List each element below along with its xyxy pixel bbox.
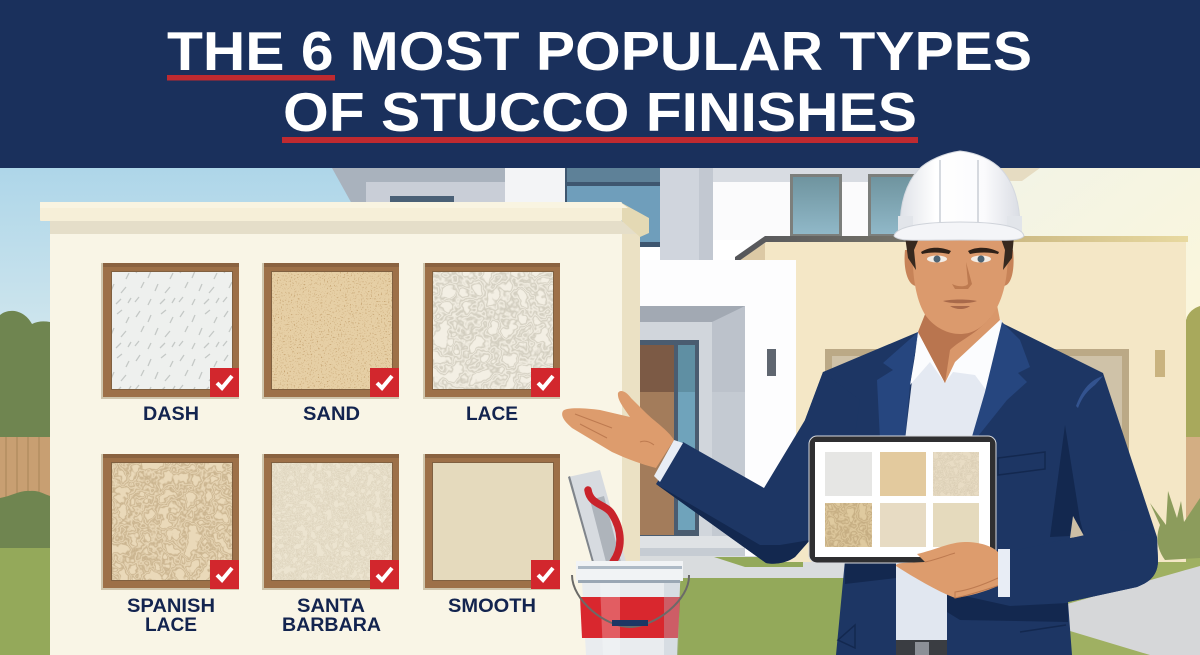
check badge <box>531 560 560 589</box>
title: THE 6 MOST POPULAR TYPES <box>167 20 1032 82</box>
swatch: lace <box>423 263 560 425</box>
wall body <box>50 222 640 655</box>
house <box>332 168 1200 562</box>
upper left roof volume <box>332 168 505 204</box>
right lapel <box>971 322 1030 440</box>
jacket lower pockets <box>838 625 1066 648</box>
shirt <box>896 320 1002 655</box>
ears <box>905 250 1014 286</box>
white entry block <box>640 260 796 556</box>
label: SANTA <box>297 596 365 617</box>
left arm <box>656 372 860 564</box>
background scenery <box>0 168 1200 655</box>
roof corner behind helmet <box>1000 168 1040 181</box>
hedge: upper left <box>0 311 50 438</box>
front door <box>640 340 699 536</box>
feature wall <box>40 202 649 655</box>
shoulder highlight <box>1076 376 1103 408</box>
label: SAND <box>303 404 360 425</box>
eyebrows <box>921 248 999 254</box>
face <box>913 235 1008 334</box>
mouth <box>943 300 977 309</box>
swatch: smooth <box>423 454 560 617</box>
grey recess <box>660 168 713 261</box>
tablet swatches <box>825 452 979 547</box>
title underline: first line <box>167 75 335 80</box>
holding hand <box>896 542 1000 598</box>
neck shadow <box>918 312 990 383</box>
pocket <box>998 452 1045 475</box>
hair <box>905 236 1014 270</box>
upper white wall <box>713 168 1000 240</box>
title: OF STUCCO FINISHES <box>283 81 917 143</box>
wall light: white block <box>767 349 776 376</box>
icon: bucket <box>572 561 689 655</box>
hedge: lower left <box>0 491 50 548</box>
check badge <box>210 560 239 589</box>
torso <box>796 323 1158 655</box>
check badge <box>370 560 399 589</box>
gap at elbow <box>1070 516 1084 538</box>
pointing hand <box>562 391 674 468</box>
label <box>127 596 215 636</box>
neck <box>918 300 1000 383</box>
white tower <box>505 168 567 208</box>
wall side shading <box>622 222 640 655</box>
label: DASH <box>143 404 199 425</box>
wall light: cream wall <box>1155 350 1165 377</box>
check badge <box>210 368 239 397</box>
left cuff <box>654 440 683 482</box>
title underline: second line <box>282 137 918 143</box>
swatch: spanish lace <box>101 454 239 636</box>
entry recess <box>640 306 745 556</box>
right forearm <box>1008 530 1158 606</box>
large window <box>565 168 671 247</box>
eyes <box>927 256 991 262</box>
wall cap <box>40 202 649 237</box>
label <box>282 596 381 636</box>
right cuff <box>998 549 1010 597</box>
label: LACE <box>466 404 518 425</box>
lawn: left <box>0 548 50 655</box>
cream wall <box>737 242 1186 562</box>
swatch: dash <box>101 263 239 425</box>
icon: trowel <box>568 470 626 562</box>
label: BARBARA <box>282 615 381 636</box>
left lapel <box>877 332 918 440</box>
upper windows <box>790 174 920 237</box>
nose <box>952 262 972 289</box>
person: contractor <box>562 151 1158 655</box>
header banner <box>0 0 1200 168</box>
entry steps <box>640 536 745 556</box>
check badge <box>370 368 399 397</box>
garage opening <box>825 349 1129 469</box>
label: LACE <box>145 615 197 636</box>
fence: left <box>0 437 50 499</box>
dark shadow under sleeve <box>1050 425 1084 537</box>
glow sky: right <box>1000 168 1200 318</box>
title <box>167 20 1032 143</box>
roof ledge <box>735 236 1188 261</box>
swatch: santa barbara <box>262 454 399 636</box>
swatch: sand <box>262 263 399 425</box>
garden plant <box>1150 491 1200 560</box>
lawn and path: centre <box>640 548 880 655</box>
shirt collar <box>910 318 1002 390</box>
tablet <box>809 436 996 563</box>
hedge and fence: right <box>1186 306 1200 527</box>
label: SPANISH <box>127 596 215 617</box>
lawn and driveway: right <box>1060 555 1200 655</box>
jacket shadow below tablet <box>845 563 1068 622</box>
hard hat <box>894 151 1024 240</box>
label: SMOOTH <box>448 596 536 617</box>
check badge <box>531 368 560 397</box>
head <box>905 235 1014 334</box>
